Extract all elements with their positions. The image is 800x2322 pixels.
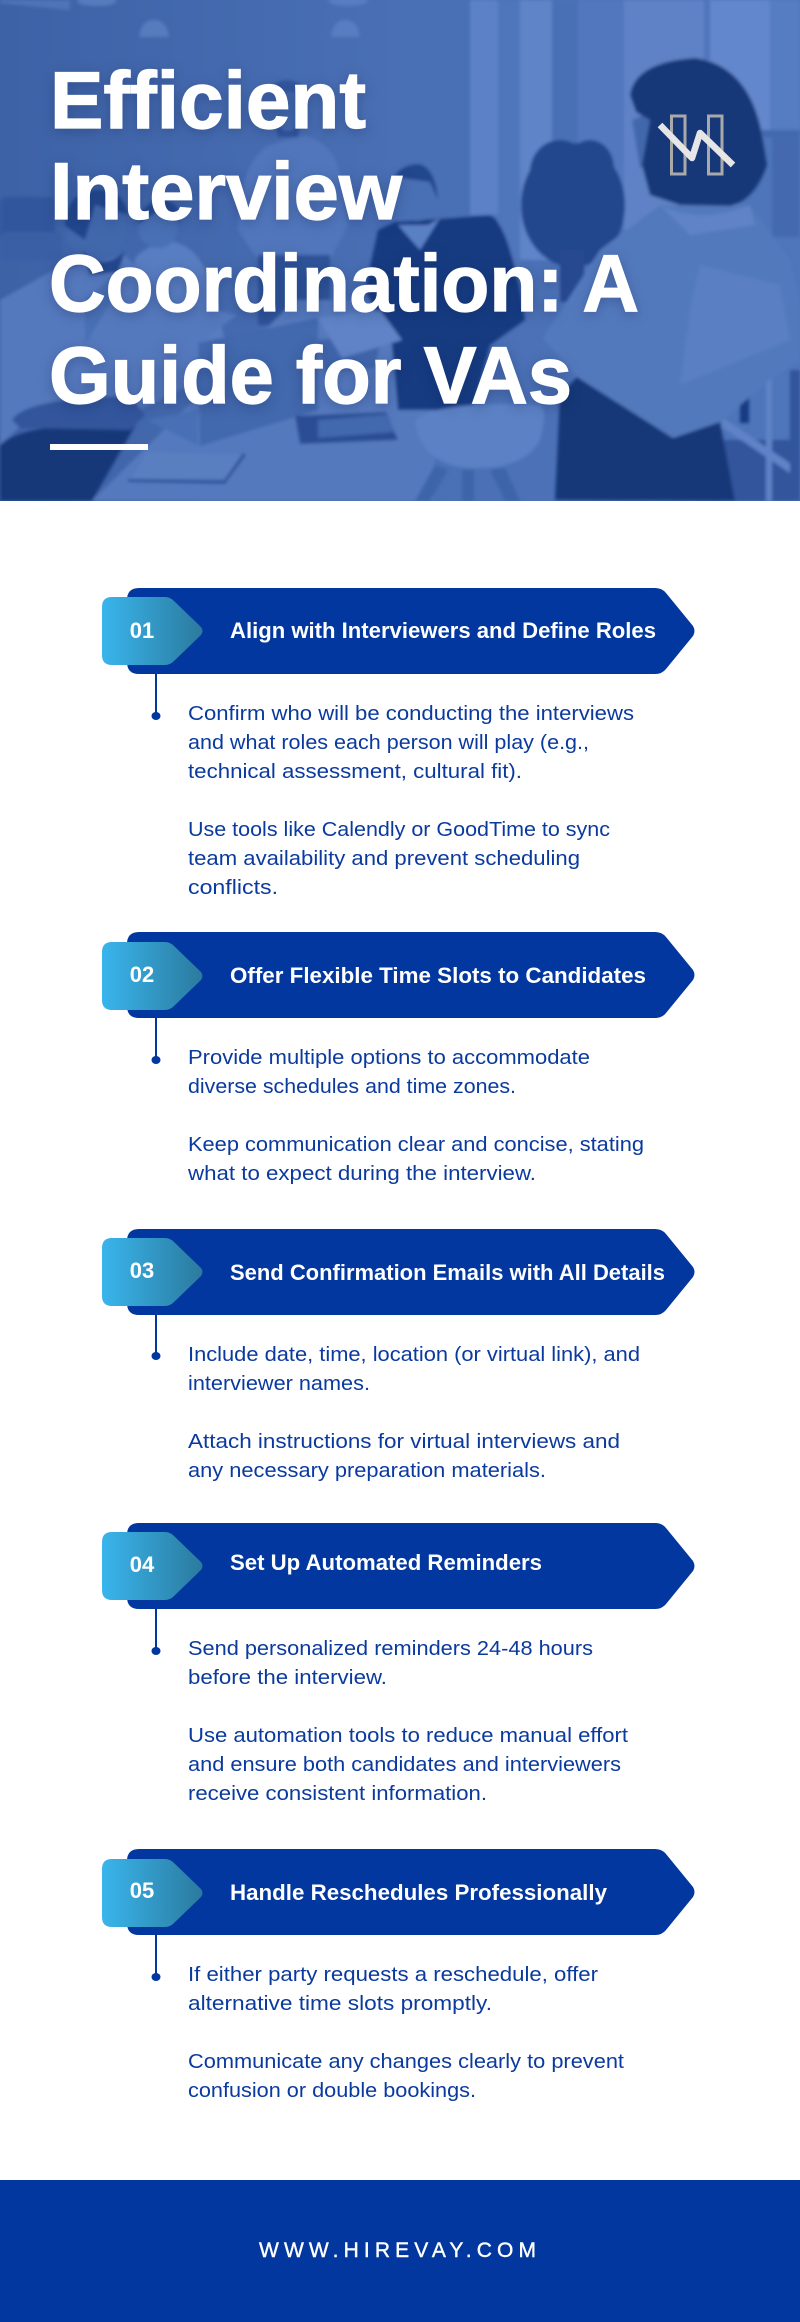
heading 05: Handle Reschedules Professionally: [230, 1880, 608, 1905]
number badge 03: [102, 1238, 202, 1306]
body text 01: Use tools like Calendly or GoodTime to sync: [188, 818, 610, 841]
body text 03: [188, 1343, 640, 1482]
step 05: [102, 1849, 694, 2102]
number badge 05: [102, 1859, 202, 1927]
number badge 04: 04: [130, 1552, 155, 1577]
connector 02: [152, 1018, 160, 1064]
number badge 02: [102, 942, 202, 1010]
body text 01: team availability and prevent scheduling: [188, 847, 580, 870]
body text 01: technical assessment, cultural fit).: [188, 760, 522, 783]
body text 01: [188, 702, 634, 899]
footer website: WWW.HIREVAY.COM: [259, 2239, 536, 2262]
connector 04: [152, 1609, 160, 1655]
title underline: [50, 444, 148, 450]
connector 01: [152, 674, 160, 720]
step 01: [102, 588, 694, 899]
connector 05: [152, 1935, 160, 1981]
body text 04: receive consistent information.: [188, 1782, 487, 1805]
body text 05: [188, 1963, 624, 2102]
body text 01: conflicts.: [188, 876, 278, 899]
number badge 04: [102, 1532, 202, 1600]
body text 04: Use automation tools to reduce manual effort: [188, 1724, 628, 1747]
body text 04: and ensure both candidates and interviewers: [188, 1753, 621, 1776]
step 03: [102, 1229, 694, 1482]
number badge 01: [102, 597, 202, 665]
number badge 02: 02: [130, 962, 154, 987]
body text 02: what to expect during the interview.: [187, 1162, 536, 1185]
body text 03: Attach instructions for virtual interviews and: [188, 1430, 620, 1453]
body text 05: alternative time slots promptly.: [188, 1992, 492, 2015]
title: Efficient: [50, 56, 366, 146]
connector 03: [152, 1315, 160, 1360]
heading 03: Send Confirmation Emails with All Details: [230, 1260, 665, 1285]
hero photo: office interview scene with blue duotone: [0, 0, 800, 501]
heading 02: Offer Flexible Time Slots to Candidates: [230, 963, 646, 988]
logo mark: [660, 116, 733, 174]
heading 01: Align with Interviewers and Define Roles: [230, 618, 656, 643]
footer band: [0, 2180, 800, 2322]
body text 05: Communicate any changes clearly to prevent: [188, 2050, 624, 2073]
banner: step 04: [127, 1523, 694, 1609]
banner: step 01: [127, 588, 694, 674]
body text 02: Provide multiple options to accommodate: [188, 1046, 590, 1069]
body text 02: [187, 1046, 644, 1185]
title: Coordination: A: [49, 239, 639, 329]
number badge 03: 03: [130, 1258, 154, 1283]
body text 02: Keep communication clear and concise, stating: [188, 1133, 644, 1156]
number badge 01: 01: [130, 618, 154, 643]
body text 03: any necessary preparation materials.: [188, 1459, 546, 1482]
body text 03: interviewer names.: [188, 1372, 370, 1395]
number badge 05: 05: [130, 1878, 154, 1903]
heading 04: Set Up Automated Reminders: [230, 1550, 542, 1575]
body text 03: Include date, time, location (or virtual link), and: [188, 1343, 640, 1366]
body text 01: Confirm who will be conducting the interviews: [188, 702, 634, 725]
title: Guide for VAs: [49, 331, 572, 421]
banner: step 03: [127, 1229, 694, 1315]
title: [49, 56, 639, 421]
step 04: [102, 1523, 694, 1805]
step 02: [102, 932, 694, 1185]
banner: step 02: [127, 932, 694, 1018]
body text 02: diverse schedules and time zones.: [188, 1075, 516, 1098]
body text 04: Send personalized reminders 24-48 hours: [188, 1637, 593, 1660]
body text 04: [188, 1637, 628, 1805]
body text 01: and what roles each person will play (e.g.,: [188, 731, 589, 754]
title: Interview: [50, 147, 403, 237]
banner: step 05: [127, 1849, 694, 1935]
body text 04: before the interview.: [188, 1666, 387, 1689]
body text 05: If either party requests a reschedule, offer: [188, 1963, 598, 1986]
body text 05: confusion or double bookings.: [188, 2079, 476, 2102]
